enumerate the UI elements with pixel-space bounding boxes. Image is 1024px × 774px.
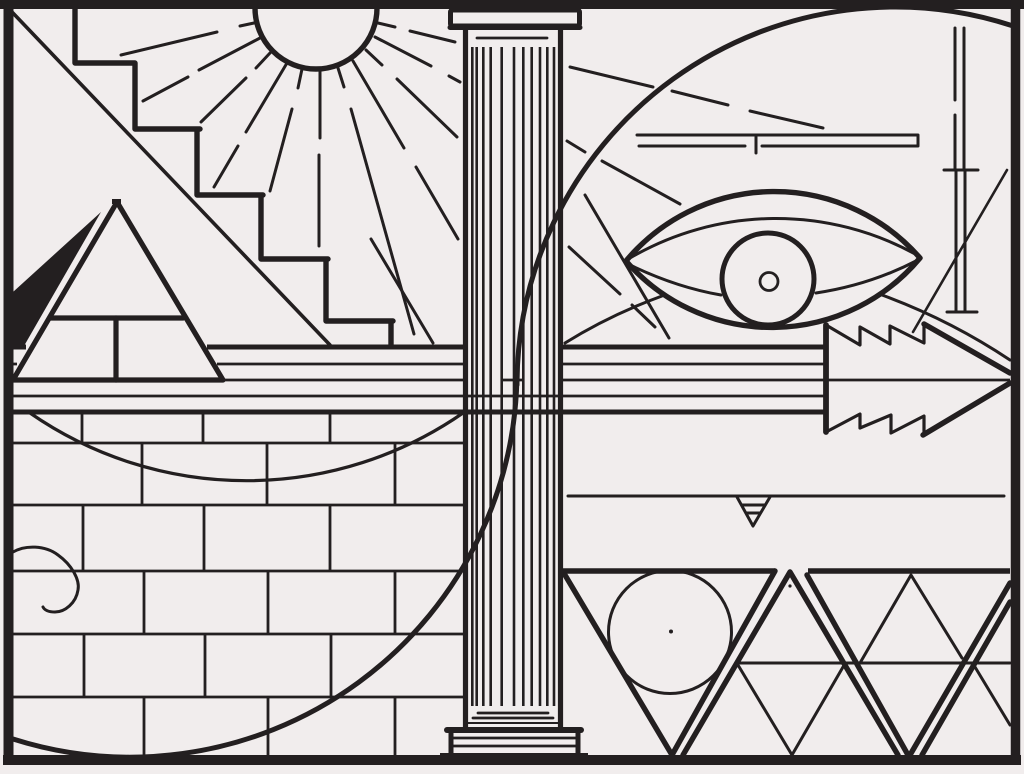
patterned frieze bbox=[563, 570, 1010, 755]
pupil bbox=[760, 272, 778, 290]
thin line into arrow bbox=[913, 170, 1007, 332]
column base bbox=[440, 713, 588, 765]
vertical bar bbox=[944, 28, 978, 312]
column capital bbox=[450, 10, 580, 38]
frieze top line bbox=[563, 568, 1010, 574]
horizontal bar bbox=[637, 135, 918, 153]
lower eyelid bbox=[628, 260, 918, 295]
iris bbox=[722, 233, 814, 325]
pyramid bbox=[13, 199, 223, 380]
thin arc behind eye bbox=[565, 295, 1010, 360]
column flutes bbox=[472, 47, 554, 706]
eye outline bbox=[626, 192, 920, 327]
column bbox=[440, 10, 588, 765]
right rays bbox=[567, 67, 823, 338]
sun bbox=[255, 8, 377, 69]
thin triangle grid bbox=[738, 575, 1010, 755]
brick wall arc bbox=[30, 413, 463, 481]
pyramid shadow bbox=[13, 212, 101, 346]
column shaft bbox=[466, 28, 560, 732]
staircase bbox=[75, 8, 393, 345]
zigzag double bands bbox=[565, 571, 1010, 755]
long rule bbox=[568, 494, 1004, 498]
staircase diagonal bbox=[12, 12, 330, 345]
spiral bbox=[13, 547, 78, 612]
eye bbox=[626, 192, 920, 327]
sun rays bbox=[121, 23, 460, 343]
small striped triangle bbox=[737, 497, 770, 526]
arrowhead bbox=[826, 324, 1010, 435]
upper eyelid bbox=[630, 218, 917, 258]
arrow shaft lines bbox=[13, 347, 1010, 412]
circle with centre dot bbox=[608, 570, 732, 694]
brick wall bbox=[13, 412, 463, 757]
